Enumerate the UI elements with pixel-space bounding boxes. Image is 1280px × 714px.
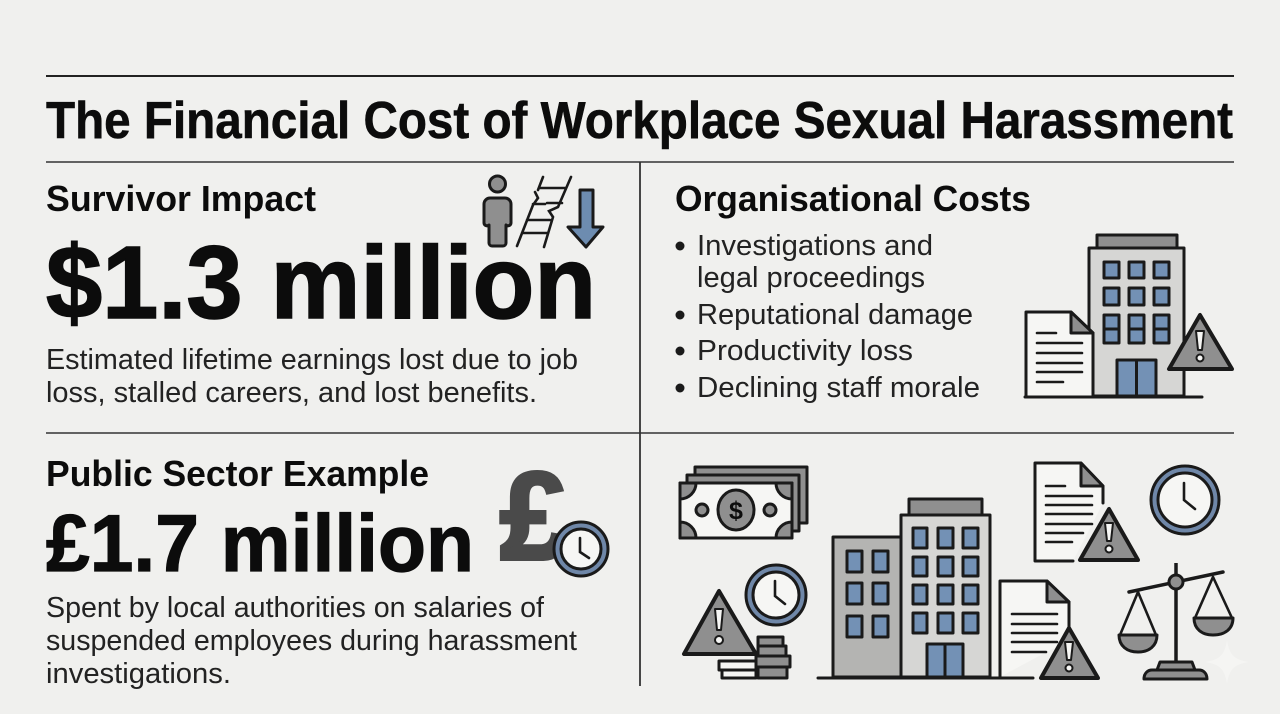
decorative sparkle mark bbox=[1205, 640, 1249, 684]
big number: £1.7 million: £1.7 million bbox=[46, 499, 474, 589]
icon: pound sign with clock bbox=[500, 448, 608, 586]
bullet list: legal proceedings bbox=[697, 262, 925, 294]
heading: survivor impact: Survivor Impact bbox=[46, 178, 316, 219]
bullet list: Declining staff morale bbox=[697, 372, 980, 404]
icon: document with warning, upper bbox=[1035, 463, 1138, 561]
icon: scales of justice bbox=[1119, 563, 1233, 679]
description: suspended employees: suspended employees during harassment bbox=[46, 625, 577, 657]
icon: banknotes bbox=[680, 467, 807, 538]
icon: person, broken ladder, down arrow bbox=[484, 176, 603, 247]
panel: survivor impact bbox=[46, 176, 603, 409]
description: lifetime earnings bbox=[46, 344, 578, 409]
icon: clock, warning and coins bbox=[684, 565, 806, 678]
icon: office building with document and warning bbox=[1025, 235, 1232, 397]
bullet list: Investigations and bbox=[697, 230, 933, 262]
heading: organisational costs: Organisational Costs bbox=[675, 178, 1031, 219]
icon: pound sign with clock: £ bbox=[500, 448, 568, 586]
big number: $1.3 million: $1.3 million bbox=[46, 225, 596, 340]
bullet list bbox=[676, 230, 980, 404]
panel: public sector example bbox=[46, 448, 608, 690]
bullet list: Reputational damage bbox=[697, 299, 973, 331]
heading: public sector example: Public Sector Example bbox=[46, 453, 429, 494]
description: suspended employees: investigations. bbox=[46, 658, 231, 690]
panel: icon collage bbox=[680, 463, 1249, 684]
description: lifetime earnings: loss, stalled careers, and lost benefits. bbox=[46, 377, 537, 409]
description: suspended employees: Spent by local authorities on salaries of bbox=[46, 592, 545, 624]
description: lifetime earnings: Estimated lifetime earnings lost due to job bbox=[46, 344, 578, 376]
description: suspended employees bbox=[46, 592, 577, 690]
icon: wall clock bbox=[1151, 466, 1219, 534]
bullet list: Productivity loss bbox=[697, 335, 913, 367]
icon: document with warning, lower bbox=[818, 581, 1098, 678]
panel: organisational costs bbox=[675, 178, 1232, 404]
icon: banknotes: $ bbox=[729, 497, 743, 525]
icon: office buildings bbox=[833, 499, 990, 677]
